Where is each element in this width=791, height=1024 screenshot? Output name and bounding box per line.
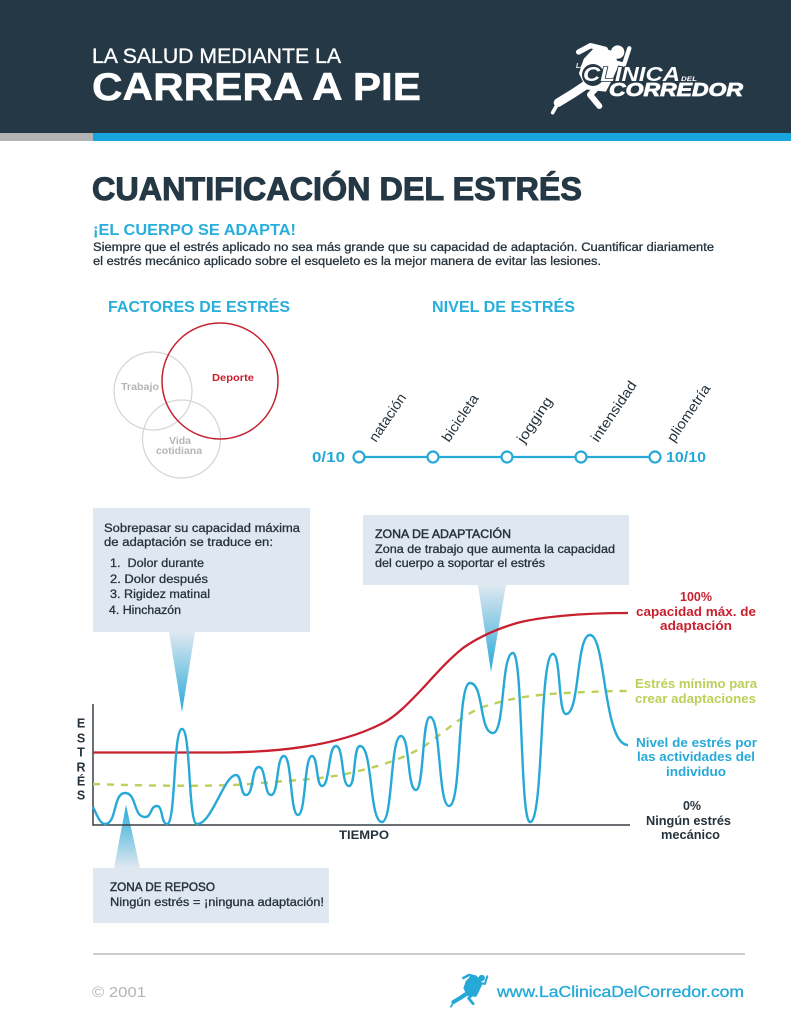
activity labels: bicicleta (438, 391, 482, 445)
subheading: ¡EL CUERPO SE ADAPTA! (93, 222, 296, 239)
heading: nivel: NIVEL DE ESTRÉS (432, 297, 575, 316)
callout: sobrepasar capacidad: 4. Hinchazón (109, 603, 181, 617)
callout: sobrepasar capacidad: 2. Dolor después (110, 572, 208, 586)
activity labels (365, 378, 714, 447)
red line: capacidad máxima (93, 613, 628, 752)
venn: trabajo (114, 352, 192, 430)
venn: deporte (162, 323, 278, 439)
y-axis label (76, 716, 86, 802)
legend: nivel de estrés: Nivel de estrés por (636, 736, 757, 750)
callout: sobrepasar capacidad (93, 508, 310, 712)
x-axis label: TIEMPO (339, 828, 389, 842)
legend: ningún estrés: 0% (683, 799, 701, 813)
venn: trabajo: Trabajo (121, 381, 159, 393)
chart: estrés en el tiempo (76, 613, 632, 842)
icon: blue runner (451, 975, 487, 1007)
header banner (0, 0, 791, 141)
y-axis label: S (77, 732, 85, 746)
website: www.LaClinicaDelCorredor.com (496, 984, 744, 1001)
logo: La Clínica del Corredor (553, 45, 743, 113)
y-axis label: T (77, 746, 85, 760)
callout: zona de adaptación: Zona de trabajo que aumenta la capacidad (375, 542, 615, 556)
intro paragraph (93, 240, 714, 268)
scale line with nodes (354, 452, 660, 462)
callout: zona de reposo: ZONA DE REPOSO (110, 880, 215, 894)
logo: La Clínica del Corredor: LA (576, 63, 585, 70)
header title: CARRERA A PIE (92, 66, 421, 109)
panel: factores de estrés (108, 297, 290, 478)
logo: La Clínica del Corredor: CLINICA (583, 64, 680, 86)
green dashed line: estrés mínimo (93, 691, 632, 786)
callout: sobrepasar capacidad: de adaptación se traduce en: (104, 535, 273, 549)
axes (93, 704, 630, 825)
activity labels: jogging (513, 394, 556, 447)
intro paragraph: Siempre que el estrés aplicado no sea más grande que su capacidad de adaptación. Cuantificar diariamente (93, 240, 714, 254)
header title: LA SALUD MEDIANTE LA (92, 45, 341, 68)
legend: ningún estrés: Ningún estrés (646, 814, 731, 828)
blue line: nivel de estrés (93, 635, 628, 824)
logo: La Clínica del Corredor: DEL (681, 77, 697, 83)
legend: capacidad máxima (636, 590, 756, 633)
callout: zona de adaptación: del cuerpo a soportar el estrés (375, 556, 545, 570)
legend: estrés mínimo: Estrés mínimo para (635, 677, 758, 691)
logo: La Clínica del Corredor: CORREDOR (609, 80, 743, 100)
callout: zona de adaptación (363, 515, 629, 672)
scale ends: 0/10 (312, 449, 345, 466)
panel: nivel de estrés (312, 297, 714, 466)
callout: zona de reposo (93, 805, 329, 923)
venn: deporte: Deporte (212, 372, 254, 384)
callout: sobrepasar capacidad: 1. Dolor durante (110, 556, 204, 570)
legend: capacidad máxima: adaptación (660, 619, 732, 633)
legend: nivel de estrés: individuo (666, 765, 726, 779)
y-axis label: R (76, 760, 86, 774)
venn: vida cotidiana: Vida (169, 435, 191, 447)
main heading: CUANTIFICACIÓN DEL ESTRÉS (92, 171, 582, 207)
venn: vida cotidiana (142, 400, 220, 478)
intro paragraph: el estrés mecánico aplicado sobre el esqueleto es la mejor manera de evitar las lesiones. (93, 254, 601, 268)
y-axis label: S (77, 788, 85, 802)
legend: ningún estrés: mecánico (661, 828, 720, 842)
legend: capacidad máxima: 100% (680, 590, 712, 604)
legend: capacidad máxima: capacidad máx. de (636, 605, 756, 619)
legend: nivel de estrés: las actividades del (637, 750, 755, 764)
legend: estrés mínimo (635, 677, 758, 706)
legend: nivel de estrés (636, 736, 757, 779)
legend: estrés mínimo: crear adaptaciones (635, 692, 756, 706)
callout: zona de reposo: Ningún estrés = ¡ninguna adaptación! (110, 895, 324, 909)
activity labels: pliometría (663, 381, 714, 445)
header title (92, 45, 421, 109)
y-axis label: É (77, 774, 85, 788)
heading: factores: FACTORES DE ESTRÉS (108, 297, 290, 316)
callout: sobrepasar capacidad: Sobrepasar su capacidad máxima (104, 521, 300, 535)
icon: white runner (553, 45, 629, 113)
legend: ningún estrés (646, 799, 731, 842)
scale ends (312, 449, 706, 466)
venn: vida cotidiana: cotidiana (156, 445, 202, 457)
callout: sobrepasar capacidad: 3. Rigidez matinal (110, 587, 210, 601)
y-axis label: E (77, 716, 85, 730)
footer (92, 954, 745, 1007)
scale ends: 10/10 (666, 449, 706, 466)
activity labels: intensidad (587, 378, 640, 445)
copyright: © 2001 (92, 984, 146, 1001)
activity labels: natación (365, 390, 409, 445)
callout: zona de adaptación: ZONA DE ADAPTACIÓN (375, 526, 511, 541)
